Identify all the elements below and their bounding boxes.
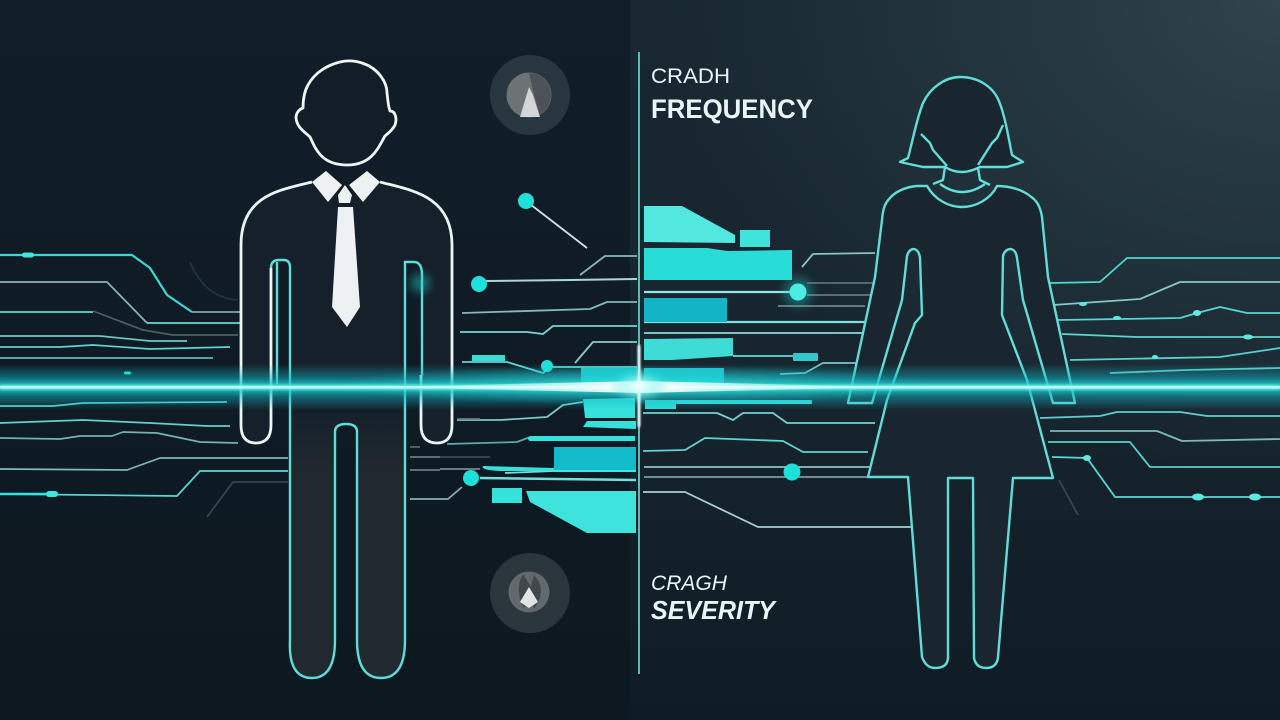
centre right data bars [644,206,818,409]
heading: crash severity [651,572,778,625]
heading: crash severity: CRAGH [651,572,728,595]
centre left data lines [410,201,637,499]
heading: crash frequency: FREQUENCY [651,94,813,124]
centre left data bars [472,355,637,533]
central flare [609,345,669,427]
man shoulders and arms outline [241,182,452,443]
heading: crash frequency [651,65,813,124]
right line glints [1079,302,1261,500]
centre divider line [638,52,640,674]
icon: crash severity badge [490,553,570,633]
man legs lighter fill [290,410,405,678]
woman neckline [940,184,985,192]
left line glints [22,252,131,497]
woman figure [848,77,1075,668]
heading: crash severity: SEVERITY [651,595,778,625]
man teal body outline [271,260,422,678]
heading: crash frequency: CRADH [651,65,730,88]
woman hair [900,77,1023,172]
left circuit lines [0,255,288,517]
right circuit lines [1040,258,1280,515]
man figure [241,61,452,678]
woman body [848,186,1075,668]
data nodes [411,193,812,486]
woman face [921,125,1003,166]
centre right data lines [643,253,911,527]
horizontal light beam [0,364,1280,410]
woman neck [933,167,990,185]
man head [296,61,396,165]
man collar and tie [312,171,380,327]
man torso and legs fill [241,182,452,678]
icon: crash frequency badge [490,55,570,135]
